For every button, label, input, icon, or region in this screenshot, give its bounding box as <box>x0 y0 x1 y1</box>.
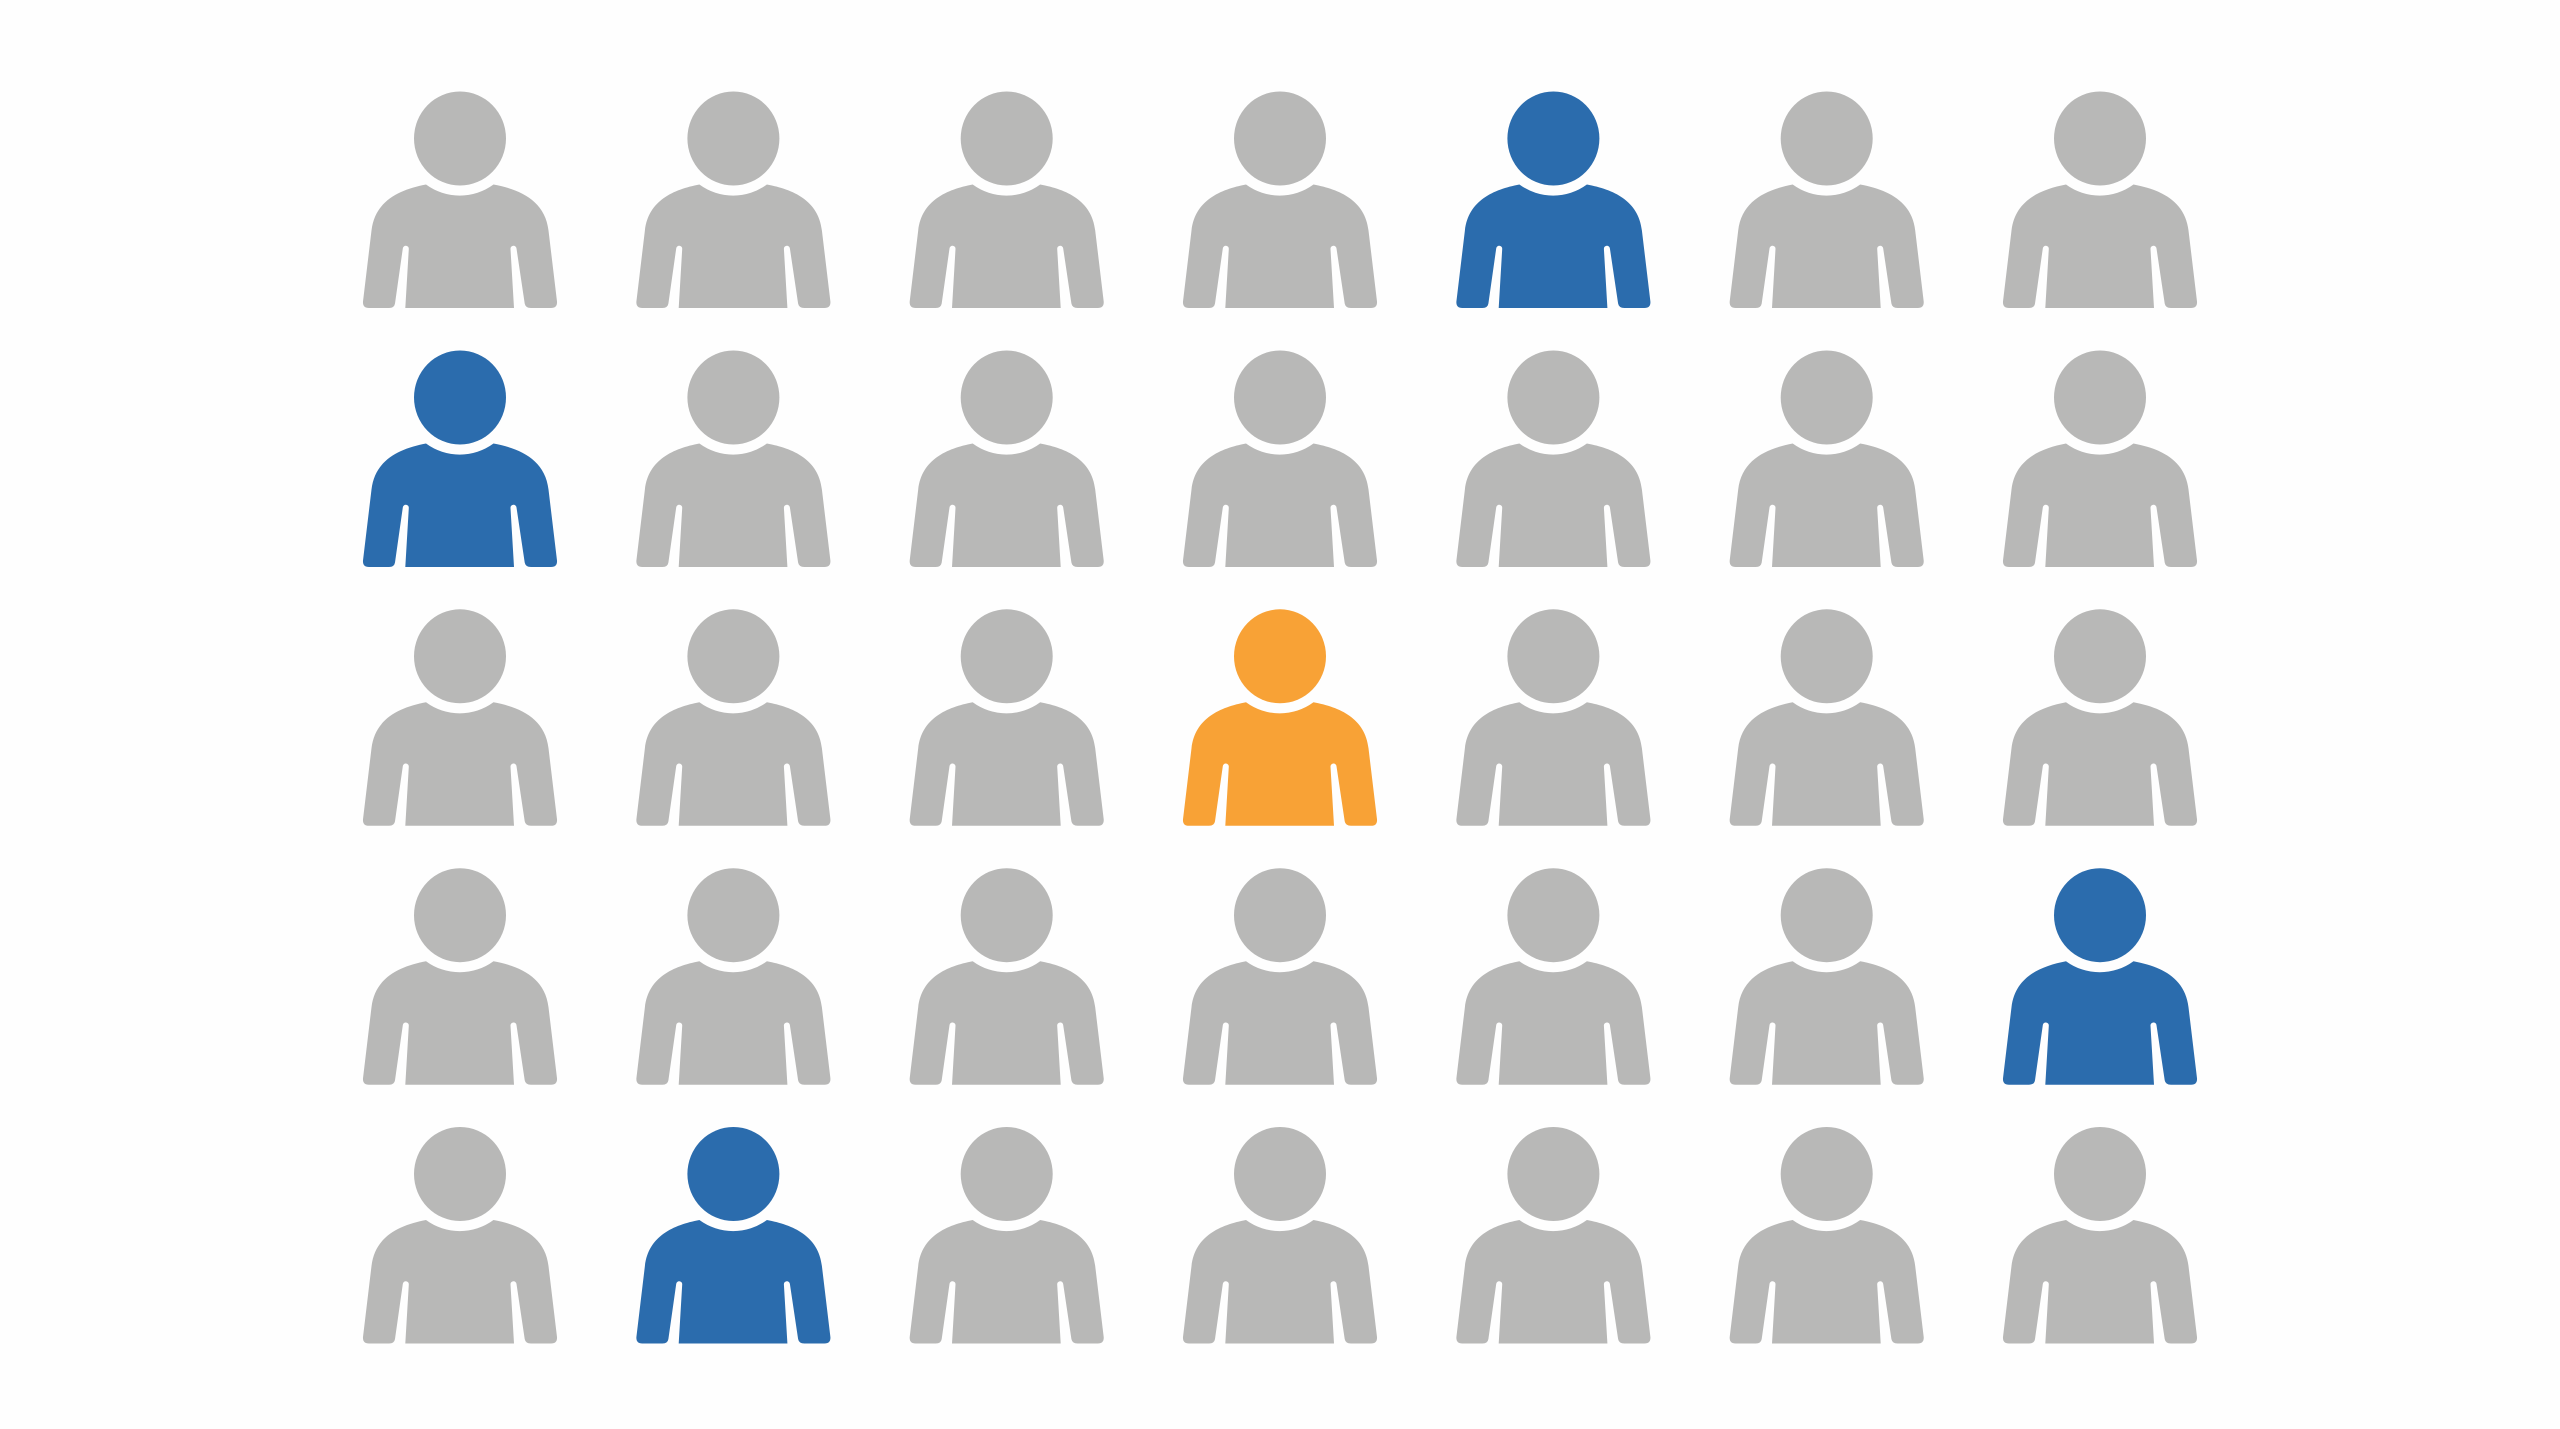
person row 4 col 1 <box>363 868 557 1085</box>
person row 1 col 4 <box>1183 92 1377 308</box>
person row 4 col 3 <box>910 868 1104 1085</box>
person row 1 col 7 <box>2003 92 2197 308</box>
person row 3 col 7 <box>2003 609 2197 826</box>
person row 5 col 3 <box>910 1127 1104 1344</box>
person row 1 col 1 <box>363 92 557 308</box>
person row 5 col 2 highlighted blue <box>636 1127 830 1344</box>
person row 4 col 2 <box>636 868 830 1085</box>
person row 5 col 5 <box>1456 1127 1650 1344</box>
person row 5 col 1 <box>363 1127 557 1344</box>
person row 1 col 6 <box>1730 92 1924 308</box>
person row 4 col 6 <box>1730 868 1924 1085</box>
person row 3 col 3 <box>910 609 1104 826</box>
person row 2 col 4 <box>1183 350 1377 567</box>
person row 5 col 6 <box>1730 1127 1924 1344</box>
person row 2 col 7 <box>2003 350 2197 567</box>
person row 5 col 7 <box>2003 1127 2197 1344</box>
person row 2 col 2 <box>636 350 830 567</box>
person row 3 col 4 highlighted orange <box>1183 609 1377 826</box>
person row 2 col 3 <box>910 350 1104 567</box>
person row 2 col 1 highlighted blue <box>363 350 557 567</box>
person row 3 col 5 <box>1456 609 1650 826</box>
person row 3 col 6 <box>1730 609 1924 826</box>
person row 2 col 6 <box>1730 350 1924 567</box>
person row 5 col 4 <box>1183 1127 1377 1344</box>
person row 1 col 2 <box>636 92 830 308</box>
person row 4 col 4 <box>1183 868 1377 1085</box>
person row 1 col 5 highlighted blue <box>1456 92 1650 308</box>
person row 4 col 7 highlighted blue <box>2003 868 2197 1085</box>
person row 1 col 3 <box>910 92 1104 308</box>
person row 3 col 1 <box>363 609 557 826</box>
person row 4 col 5 <box>1456 868 1650 1085</box>
person row 2 col 5 <box>1456 350 1650 567</box>
person row 3 col 2 <box>636 609 830 826</box>
